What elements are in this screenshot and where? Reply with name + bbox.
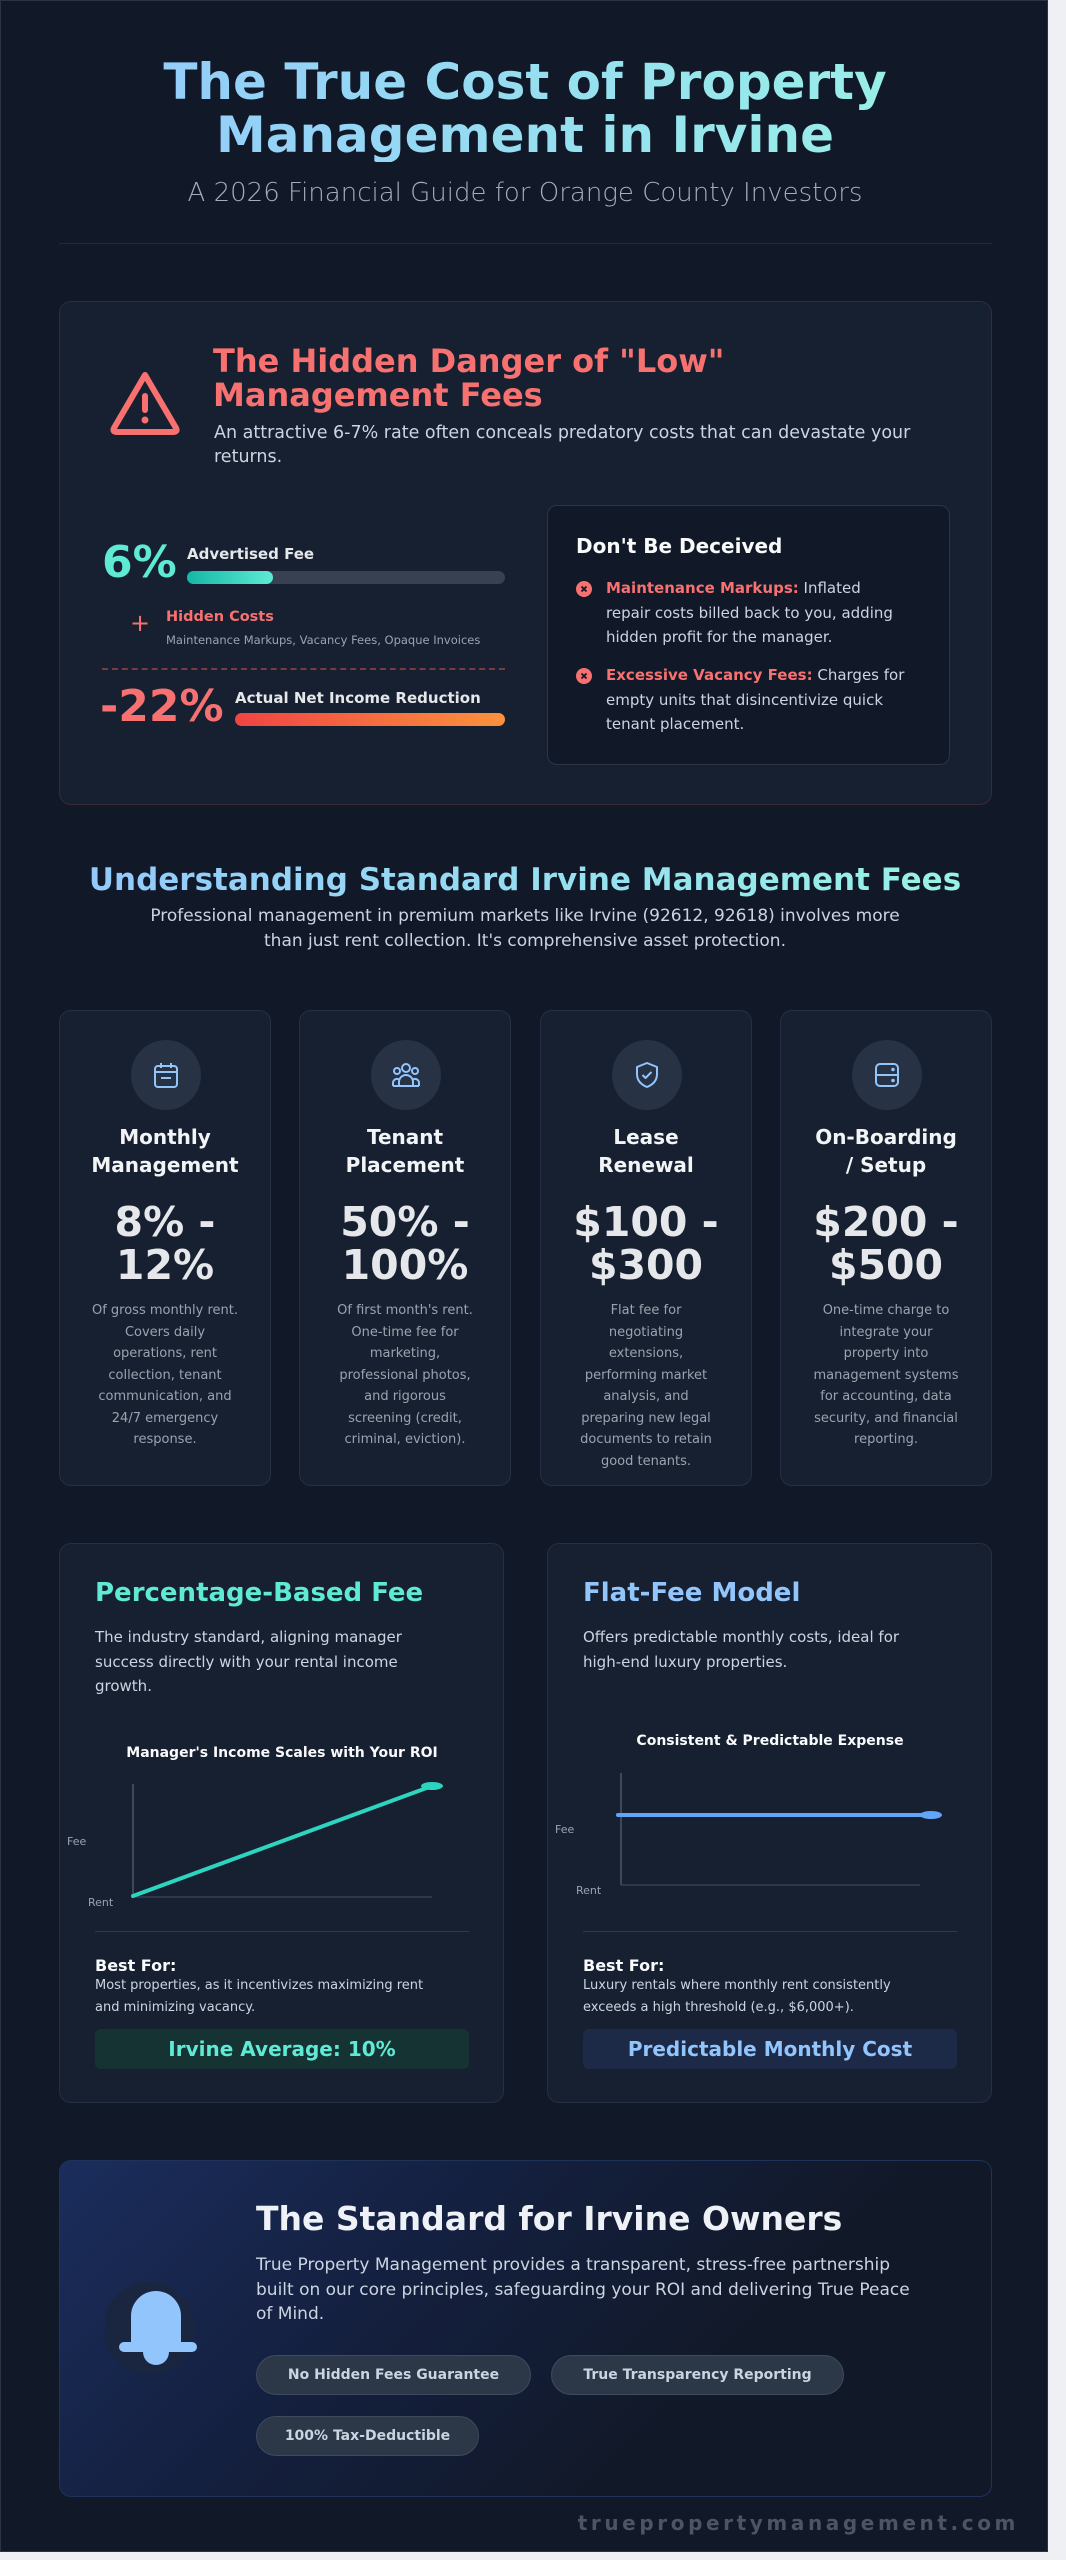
stat: advertised fee: Advertised Fee bbox=[187, 545, 314, 563]
card: lease renewal: $300 bbox=[589, 1241, 703, 1289]
title: The True Cost of Property bbox=[163, 53, 887, 111]
stat: net reduction bbox=[100, 681, 505, 732]
pill: no hidden fees bbox=[256, 2355, 531, 2395]
chart: scaling line: Fee bbox=[67, 1835, 86, 1848]
heading: understanding fees: Understanding Standard Irvine Management Fees bbox=[89, 862, 961, 898]
stat: net reduction: Actual Net Income Reduction bbox=[235, 689, 481, 707]
chart: scaling line: Manager's Income Scales with Your ROI bbox=[126, 1745, 438, 1761]
item: vacancy fees: Excessive Vacancy Fees: Charges for empty units that disincentivize quick tenant placement. bbox=[606, 666, 904, 733]
card: onboarding: / Setup bbox=[846, 1153, 926, 1177]
card: onboarding: $200 - bbox=[813, 1198, 959, 1246]
panel: percentage-based fee bbox=[59, 1543, 504, 2103]
card: lease renewal: Renewal bbox=[598, 1153, 694, 1177]
chart: flat line: Consistent & Predictable Expense bbox=[636, 1733, 904, 1749]
card: monthly management: Management bbox=[91, 1153, 239, 1177]
callout: don't be deceived: Don't Be Deceived bbox=[576, 534, 782, 558]
heading: standard: The Standard for Irvine Owners bbox=[256, 2199, 842, 2238]
text: best for: Best For: bbox=[95, 1956, 176, 1975]
chart: flat line: Fee bbox=[555, 1823, 574, 1836]
text: best for bbox=[583, 1956, 891, 2014]
card: monthly management: Monthly bbox=[119, 1125, 211, 1149]
icon: people bbox=[371, 1040, 441, 1110]
icon: shield bbox=[612, 1040, 682, 1110]
text: best for: Best For: bbox=[583, 1956, 664, 1975]
card: tenant placement: 100% bbox=[342, 1241, 468, 1289]
panel: percentage-based fee: Percentage-Based Fee bbox=[95, 1578, 423, 1608]
card: tenant placement: 50% - bbox=[340, 1198, 470, 1246]
chart: flat line bbox=[555, 1733, 942, 1897]
badge: irvine average bbox=[95, 2029, 469, 2069]
icon: warning bbox=[110, 372, 180, 435]
stat: advertised fee: 6% bbox=[102, 537, 177, 588]
icon: server bbox=[852, 1040, 922, 1110]
panel: flat-fee model bbox=[547, 1543, 992, 2103]
card: lease renewal: Lease bbox=[613, 1125, 679, 1149]
title bbox=[1, 56, 1049, 162]
text: standard description: True Property Management provides a transparent, stress-free partnership built on our core principles, safeguarding your ROI and delivering True Peace of Mind. bbox=[256, 2255, 910, 2324]
chart: scaling line bbox=[67, 1745, 443, 1909]
icon: bell bbox=[105, 2282, 197, 2374]
title: Management in Irvine bbox=[216, 106, 834, 164]
footer: website: truepropertymanagement.com bbox=[578, 2511, 1019, 2535]
text: section intro: Professional management in premium markets like Irvine (92612, 92618) involves more than just rent collection. It's comprehensive asset protection. bbox=[150, 906, 900, 951]
badge: predictable cost: Predictable Monthly Cost bbox=[628, 2037, 912, 2061]
card: tenant placement: Tenant bbox=[367, 1125, 443, 1149]
card: lease renewal: $100 - bbox=[573, 1198, 719, 1246]
card: tenant placement bbox=[299, 1010, 511, 1486]
pill: transparency bbox=[551, 2355, 844, 2395]
stat: hidden costs: Maintenance Markups, Vacancy Fees, Opaque Invoices bbox=[166, 633, 480, 647]
stat: hidden costs: Hidden Costs bbox=[166, 609, 274, 625]
badge: irvine average: Irvine Average: 10% bbox=[168, 2037, 396, 2061]
card: lease renewal bbox=[540, 1010, 752, 1486]
panel: flat-fee model: Flat-Fee Model bbox=[583, 1578, 800, 1608]
pill: tax-deductible: 100% Tax-Deductible bbox=[285, 2428, 450, 2444]
panel: hidden danger bbox=[59, 301, 992, 805]
card: onboarding: $500 bbox=[829, 1241, 943, 1289]
panel: percentage-based fee: The industry standard, aligning manager success directly with your rental income growth. bbox=[95, 1628, 402, 1695]
chart: scaling line: Rent bbox=[88, 1896, 114, 1909]
pill: no hidden fees: No Hidden Fees Guarantee bbox=[288, 2367, 499, 2383]
pill: transparency: True Transparency Reporting bbox=[583, 2367, 812, 2383]
icon: calendar bbox=[131, 1040, 201, 1110]
heading: hidden danger: Management Fees bbox=[213, 376, 543, 414]
stat: hidden costs: + bbox=[130, 609, 150, 637]
panel: standard for irvine owners bbox=[59, 2160, 992, 2497]
text: intro: An attractive 6-7% rate often conceals predatory costs that can devastate your returns. bbox=[214, 423, 910, 467]
text: best for bbox=[95, 1956, 423, 2014]
subtitle: A 2026 Financial Guide for Orange County Investors bbox=[188, 178, 862, 208]
card: onboarding: One-time charge to integrate your property into management systems for accounting, data security, and financial reporting. bbox=[814, 1303, 958, 1447]
card: lease renewal: Flat fee for negotiating extensions, performing market analysis, and preparing new legal documents to retain good tenants. bbox=[580, 1303, 712, 1468]
chart: flat line: Rent bbox=[576, 1884, 602, 1897]
card: tenant placement: Of first month's rent. One-time fee for marketing, professional photos, and rigorous screening (credit, criminal, eviction). bbox=[337, 1303, 473, 1447]
card: monthly management: 12% bbox=[116, 1241, 214, 1289]
badge: predictable cost bbox=[583, 2029, 957, 2069]
card: monthly management bbox=[59, 1010, 271, 1486]
card: onboarding bbox=[780, 1010, 992, 1486]
text: best for: Most properties, as it incentivizes maximizing rent and minimizing vacancy. bbox=[95, 1978, 423, 2014]
stat: hidden costs bbox=[130, 609, 480, 647]
stat: advertised fee bbox=[102, 537, 505, 588]
card: monthly management: Of gross monthly rent. Covers daily operations, rent collection, tenant communication, and 24/7 emergency response. bbox=[92, 1303, 238, 1447]
callout: don't be deceived bbox=[547, 505, 950, 765]
heading: hidden danger bbox=[213, 342, 724, 414]
card: monthly management: 8% - bbox=[115, 1198, 215, 1246]
item: maintenance markups: Maintenance Markups: Inflated repair costs billed back to you, adding hidden profit for the manager. bbox=[606, 579, 893, 646]
heading: hidden danger: The Hidden Danger of "Low" bbox=[213, 342, 724, 380]
pill: tax-deductible bbox=[256, 2416, 479, 2456]
card: onboarding: On-Boarding bbox=[815, 1125, 957, 1149]
card: tenant placement: Placement bbox=[346, 1153, 464, 1177]
panel: flat-fee model: Offers predictable monthly costs, ideal for high-end luxury properties. bbox=[583, 1628, 899, 1670]
text: best for: Luxury rentals where monthly rent consistently exceeds a high threshold (e.g., $6,000+). bbox=[583, 1978, 891, 2014]
stat: net reduction: -22% bbox=[100, 681, 224, 732]
